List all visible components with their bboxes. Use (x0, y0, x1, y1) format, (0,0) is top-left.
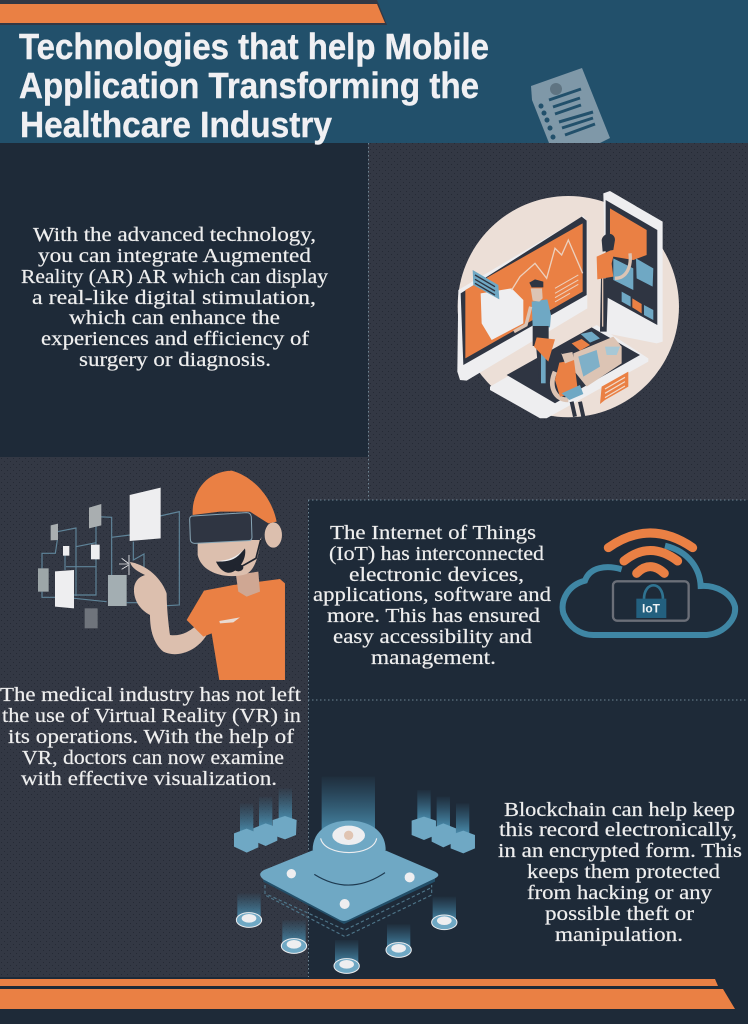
illustration: blockchain platform (234, 777, 475, 973)
text: augmented reality: Reality (AR) AR which can display (21, 267, 328, 288)
small light discs (236, 893, 457, 973)
text: virtual reality (0, 685, 302, 790)
microphone (233, 540, 261, 571)
text: augmented reality: which can enhance the (69, 308, 280, 329)
speech bubble blue (473, 270, 499, 299)
illustration: augmented reality devices (457, 191, 679, 418)
icon: clipboard (531, 68, 610, 143)
dashed lower layers (265, 885, 432, 937)
phone (603, 191, 663, 343)
title: Healthcare Industry (20, 104, 332, 145)
text: internet of things: more. This has ensured (327, 606, 540, 627)
hair (193, 471, 277, 523)
tablet (490, 325, 648, 418)
monitor (457, 216, 587, 381)
text: blockchain: manipulation. (555, 925, 683, 946)
ear (265, 522, 282, 548)
neck (236, 572, 260, 597)
mouth (216, 548, 245, 573)
text: augmented reality: you can integrate Augmented (38, 246, 311, 267)
text: virtual reality: with effective visualization. (21, 769, 277, 790)
padlock (636, 585, 666, 618)
text: blockchain: possible theft or (545, 904, 695, 925)
central light beam (322, 777, 375, 833)
floating panels (38, 488, 161, 628)
text: virtual reality: The medical industry has not left (0, 685, 302, 706)
person on phone (597, 234, 630, 332)
top strip (0, 0, 387, 25)
text: blockchain: in an encrypted form. This (498, 841, 742, 862)
text: augmented reality: experiences and efficiency of (41, 329, 310, 350)
shirt (187, 579, 285, 680)
text: augmented reality: With the advanced technology, (33, 225, 316, 246)
text: virtual reality: its operations. With the help of (8, 727, 295, 748)
text: augmented reality (21, 225, 328, 371)
head (198, 525, 263, 576)
text: internet of things (313, 523, 551, 669)
wifi arcs (608, 533, 693, 573)
central dome (313, 821, 386, 858)
text: virtual reality: VR, doctors can now examine (22, 748, 284, 769)
header band (0, 0, 748, 143)
screen frame (613, 581, 689, 621)
text: internet of things: electronic devices, (349, 565, 524, 586)
text: augmented reality: surgery or diagnosis. (79, 350, 271, 371)
title: Application Transforming the (19, 65, 479, 106)
left cube cluster (234, 788, 297, 853)
seated person (552, 347, 583, 417)
person with book (514, 279, 555, 383)
circuit diagram (42, 512, 179, 606)
icon: IoT cloud (563, 533, 735, 635)
sparkle at fingertip (119, 555, 129, 575)
platform (260, 836, 438, 924)
text: blockchain: Blockchain can help keep (504, 800, 735, 821)
title: Technologies that help Mobile (19, 26, 489, 67)
orange top bar (0, 4, 385, 23)
speech bubble orange (600, 372, 628, 404)
text: internet of things: (IoT) has interconnected (329, 544, 544, 565)
illustration: virtual reality user (38, 471, 285, 680)
cloud outline (563, 546, 735, 635)
circle backdrop (458, 196, 679, 417)
right cube cluster (412, 790, 475, 853)
goggles (190, 513, 268, 543)
title (19, 26, 489, 145)
shirt logo (219, 617, 240, 623)
text: internet of things: management. (371, 648, 496, 669)
text: internet of things: applications, software and (313, 585, 551, 606)
text: augmented reality: a real-like digital stimulation, (32, 288, 316, 309)
arm and hand (130, 562, 207, 654)
text: blockchain (498, 800, 742, 946)
text: internet of things: The Internet of Things (330, 523, 536, 544)
text: blockchain: from hacking or any (527, 883, 712, 904)
text: internet of things: easy accessibility and (333, 627, 532, 648)
text: virtual reality: the use of Virtual Reality (VR) in (2, 706, 301, 727)
text: blockchain: this record electronically, (499, 820, 737, 841)
padlock: IoT (642, 601, 661, 615)
bottom orange bars (0, 979, 735, 1009)
text: blockchain: keeps them protected (527, 862, 720, 883)
